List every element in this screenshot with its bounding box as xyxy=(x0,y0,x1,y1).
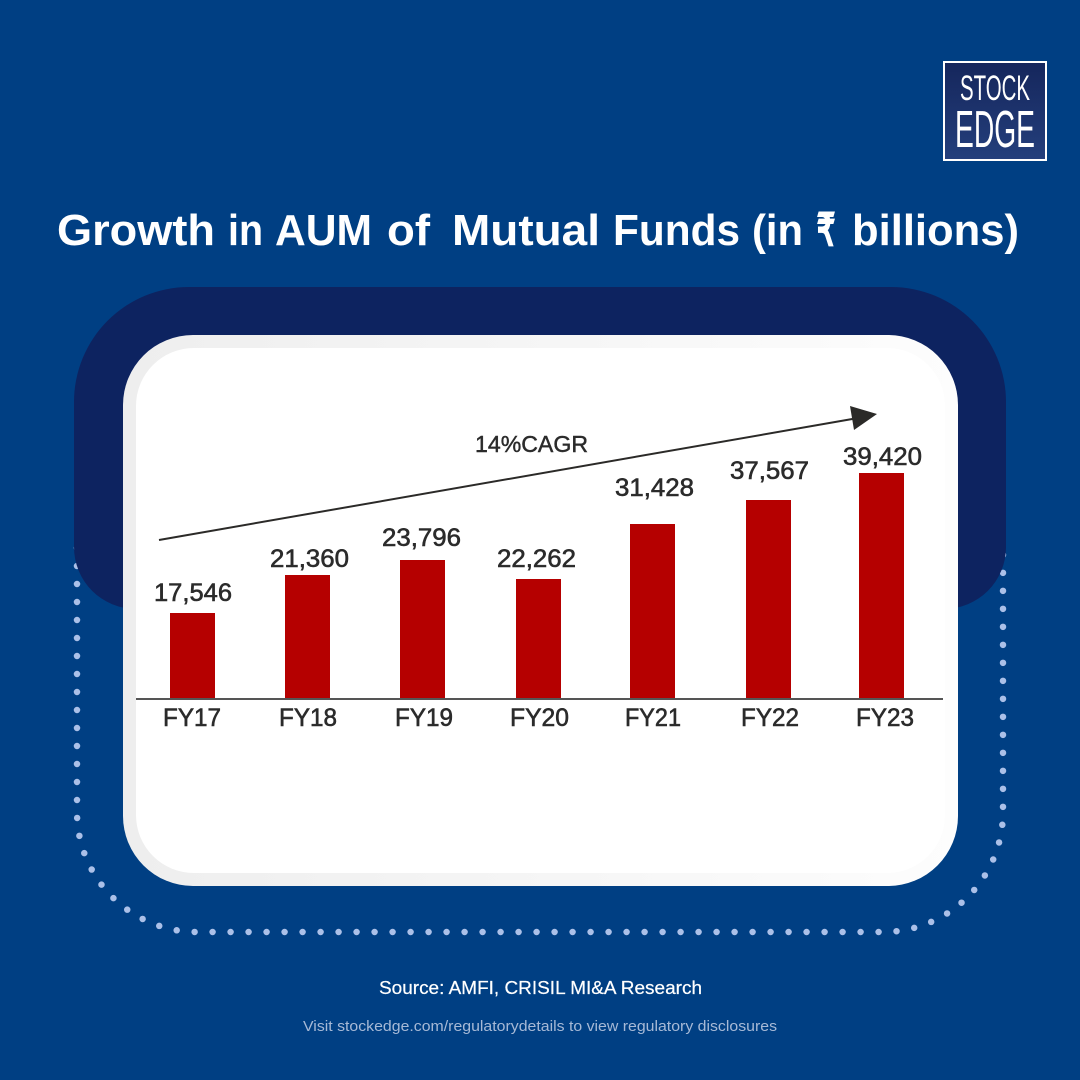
logo: StockEdge xyxy=(944,62,1046,160)
arrow: growth trend xyxy=(159,406,877,540)
source: Source: AMFI, CRISIL MI&A Research xyxy=(379,977,702,998)
title: Funds xyxy=(613,206,740,255)
value labels: 17,546 xyxy=(154,579,232,607)
bar chart xyxy=(136,443,943,732)
title: billions) xyxy=(852,206,1019,255)
axis labels: FY21 xyxy=(625,704,681,732)
value labels xyxy=(154,443,922,607)
bar FY20 xyxy=(516,579,561,699)
dark backing panel xyxy=(74,287,1006,609)
CAGR label: 14%CAGR xyxy=(475,431,588,457)
title: in xyxy=(228,206,263,255)
title: (in xyxy=(752,206,803,255)
bar FY22 xyxy=(746,500,791,699)
axis labels: FY20 xyxy=(510,704,569,732)
bar FY19 xyxy=(400,560,445,699)
dotted outline xyxy=(77,548,1003,932)
title: ₹ xyxy=(817,206,835,255)
value labels: 21,360 xyxy=(270,545,349,573)
axis labels: FY22 xyxy=(741,704,799,732)
axis labels: FY17 xyxy=(163,704,221,732)
title: Growth xyxy=(57,206,215,255)
value labels: 23,796 xyxy=(382,524,461,552)
disclaimer: Visit stockedge.com/regulatorydetails to view regulatory disclosures xyxy=(303,1019,777,1035)
axis labels xyxy=(163,704,914,732)
title: AUM xyxy=(275,206,372,255)
value labels: 31,428 xyxy=(615,474,694,502)
title xyxy=(57,206,1019,255)
value labels: 39,420 xyxy=(843,443,922,471)
panel: chart card xyxy=(123,335,958,886)
axis labels: FY18 xyxy=(279,704,337,732)
title: of xyxy=(387,206,430,255)
chart card inner xyxy=(136,348,945,873)
bar FY23 xyxy=(859,473,904,699)
bar FY21 xyxy=(630,524,675,699)
title: Mutual xyxy=(452,206,600,255)
logo: StockEdge: STOCK xyxy=(960,69,1030,108)
value labels: 22,262 xyxy=(497,545,576,573)
bar FY17 xyxy=(170,613,215,699)
bar FY18 xyxy=(285,575,330,699)
axis labels: FY19 xyxy=(395,704,453,732)
axis labels: FY23 xyxy=(856,704,914,732)
value labels: 37,567 xyxy=(730,457,809,485)
